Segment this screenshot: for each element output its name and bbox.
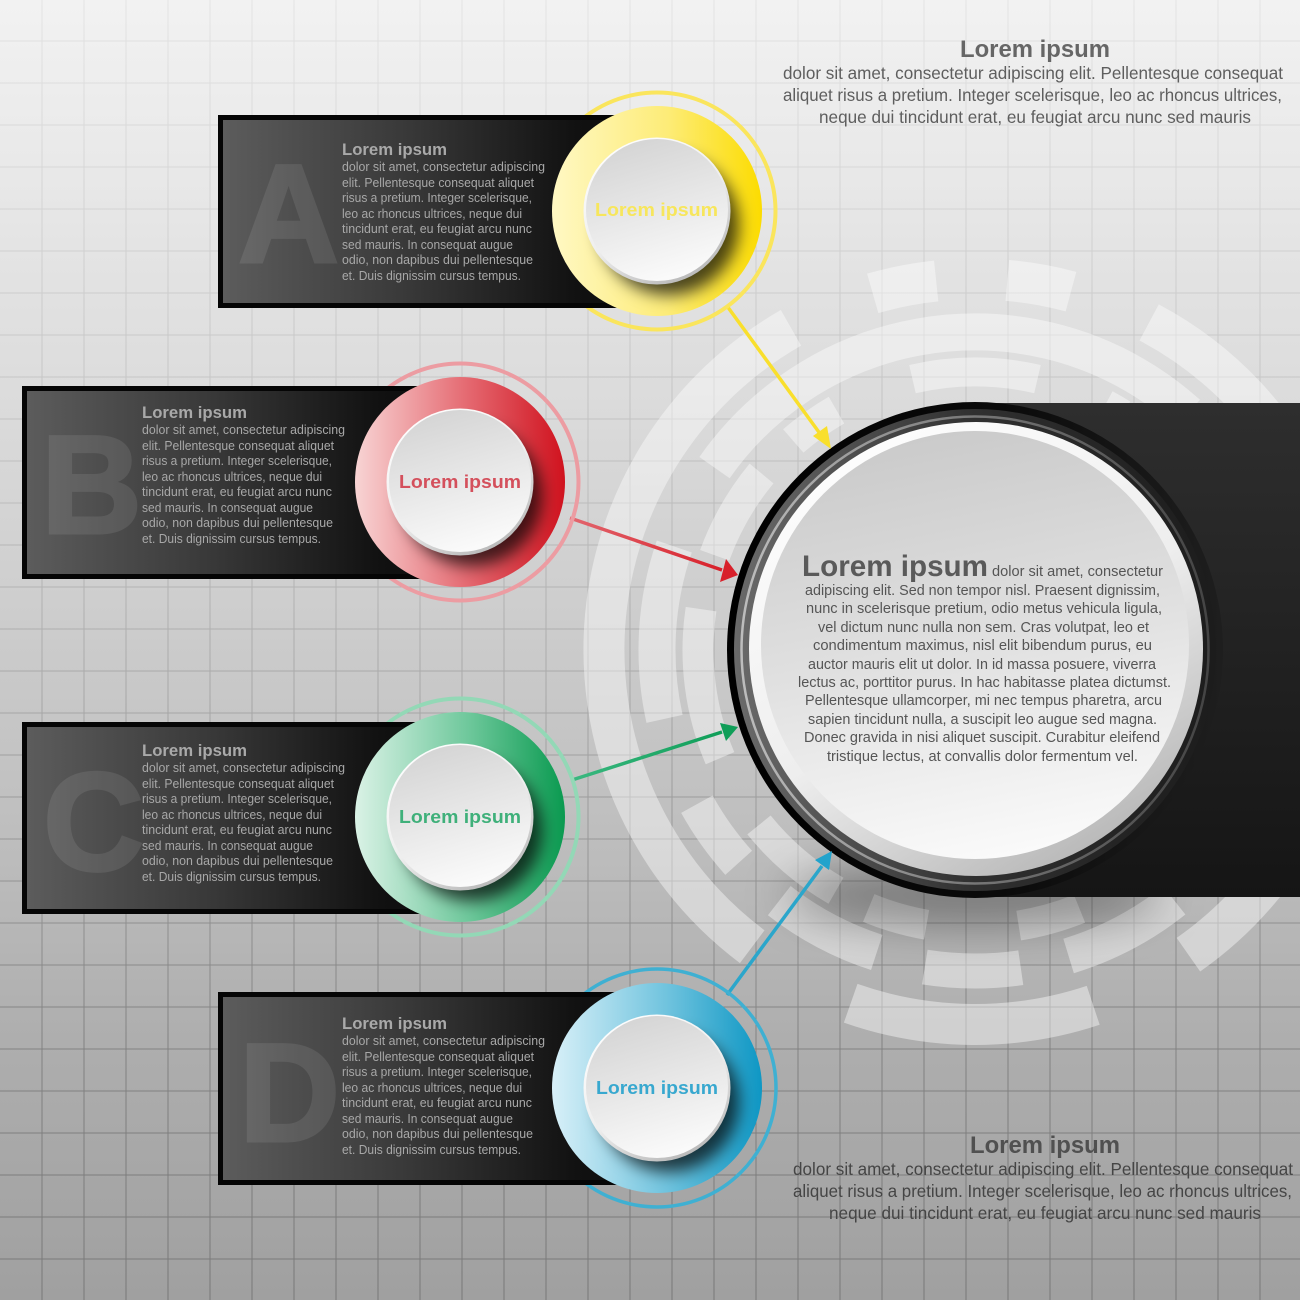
top text block: dolor sit amet, consectetur adipiscing elit. Pellentesque consequat [783,63,1283,83]
arrow: red [570,518,738,582]
central text [798,550,1171,765]
card B: B [41,406,142,563]
coloured circle C [355,712,565,922]
panel D [218,969,776,1207]
coloured circle A [552,106,762,316]
card A: tincidunt erat, eu feugiat arcu nunc [342,221,532,236]
coloured circle B [355,377,565,587]
card B: tincidunt erat, eu feugiat arcu nunc [142,484,332,499]
white disc B [386,408,534,556]
coloured circle D [552,983,762,1193]
card C: Lorem ipsum [142,741,247,760]
white disc C: Lorem ipsum [399,807,521,827]
central text: nunc in scelerisque pretium, odio metus vehicula ligula, [806,600,1162,617]
central text: condimentum maximus, nisl elit bibendum purus, eu [813,637,1152,654]
central text: auctor mauris elit ut dolor. In id massa posuere, viverra [808,656,1157,673]
panel A [218,92,776,330]
top text block [783,36,1283,127]
central text: Pellentesque ullamcorper, mi nec tempus pharetra, arcu [805,692,1162,709]
arrow: yellow [727,306,831,449]
top text block: aliquet risus a pretium. Integer scelerisque, leo ac rhoncus ultrices, [783,85,1282,105]
ring B [342,364,578,600]
bottom text block: aliquet risus a pretium. Integer scelerisque, leo ac rhoncus ultrices, [793,1181,1292,1201]
central shadow [785,863,1165,927]
card C: et. Duis dignissim cursus tempus. [142,869,321,884]
card A: dolor sit amet, consectetur adipiscing [342,159,545,174]
card A: leo ac rhoncus ultrices, neque dui [342,206,522,221]
white disc B: Lorem ipsum [399,472,521,492]
card A: et. Duis dignissim cursus tempus. [342,268,521,283]
card D: elit. Pellentesque consequat aliquet [342,1049,534,1064]
card B [22,386,442,579]
central disc rim [749,422,1203,876]
panel B [22,364,578,600]
panel: central dark band [975,403,1300,897]
bottom text block: Lorem ipsum [970,1132,1120,1159]
card D [218,992,638,1185]
card D: et. Duis dignissim cursus tempus. [342,1142,521,1157]
central text: sapien tincidunt nulla, a suscipit leo augue sed magna. [808,711,1157,728]
card D: odio, non dapibus dui pellentesque [342,1126,533,1141]
central text: lectus ac, porttitor purus. In hac habitasse platea dictumst. [798,674,1171,691]
card D: tincidunt erat, eu feugiat arcu nunc [342,1095,532,1110]
card D: leo ac rhoncus ultrices, neque dui [342,1080,522,1095]
central text: vel dictum nunc nulla non sem. Cras volutpat, leo et [818,619,1150,636]
card B: et. Duis dignissim cursus tempus. [142,531,321,546]
card C [22,722,442,914]
card B: sed mauris. In consequat augue [142,500,313,515]
card C: C [43,743,144,900]
card D: sed mauris. In consequat augue [342,1111,513,1126]
card A: Lorem ipsum [342,140,447,159]
card D: Lorem ipsum [342,1014,447,1033]
card C: elit. Pellentesque consequat aliquet [142,776,334,791]
card D: dolor sit amet, consectetur adipiscing [342,1033,545,1048]
bottom text block: neque dui tincidunt erat, eu feugiat arcu nunc sed mauris [829,1203,1261,1223]
card C: risus a pretium. Integer scelerisque, [142,791,332,806]
top text block: Lorem ipsum [960,36,1110,63]
bottom text block [793,1132,1293,1223]
card C: sed mauris. In consequat augue [142,838,313,853]
bottom text block: dolor sit amet, consectetur adipiscing elit. Pellentesque consequat [793,1159,1293,1179]
card A: A [238,135,339,292]
card D: D [239,1014,340,1171]
ring D [538,969,776,1207]
central text: dolor sit amet, consectetur [992,563,1163,580]
card C: tincidunt erat, eu feugiat arcu nunc [142,822,332,837]
central text: tristique lectus, at convallis dolor fermentum vel. [827,748,1138,765]
card B: elit. Pellentesque consequat aliquet [142,438,334,453]
card C: dolor sit amet, consectetur adipiscing [142,760,345,775]
panel C [22,698,578,936]
card B: dolor sit amet, consectetur adipiscing [142,422,345,437]
white disc D: Lorem ipsum [596,1078,718,1098]
card D: risus a pretium. Integer scelerisque, [342,1064,532,1079]
arrow: green [572,723,738,780]
concentric technology ring segments [452,127,1300,1173]
central text: adipiscing elit. Sed non tempor nisl. Praesent dignissim, [805,582,1160,599]
ring C [342,698,578,936]
card A [218,115,638,308]
card A: elit. Pellentesque consequat aliquet [342,175,534,190]
central text: Lorem ipsum [802,550,988,583]
white disc A: Lorem ipsum [595,200,718,220]
card A: sed mauris. In consequat augue [342,237,513,252]
central disc face [761,431,1189,859]
card B: risus a pretium. Integer scelerisque, [142,453,332,468]
white disc D [584,1014,730,1162]
card B: Lorem ipsum [142,403,247,422]
card A: odio, non dapibus dui pellentesque [342,252,533,267]
top text block: neque dui tincidunt erat, eu feugiat arcu nunc sed mauris [819,107,1251,127]
card C: leo ac rhoncus ultrices, neque dui [142,807,322,822]
central circle [727,402,1223,898]
ring A [538,92,776,330]
card B: leo ac rhoncus ultrices, neque dui [142,469,322,484]
card B: odio, non dapibus dui pellentesque [142,515,333,530]
card C: odio, non dapibus dui pellentesque [142,853,333,868]
white disc A [584,138,730,284]
card A: risus a pretium. Integer scelerisque, [342,190,532,205]
white disc C [386,744,534,890]
central text: Donec gravida in nisi aliquet suscipit. Curabitur eleifend [804,729,1160,746]
arrow: blue [727,851,832,995]
